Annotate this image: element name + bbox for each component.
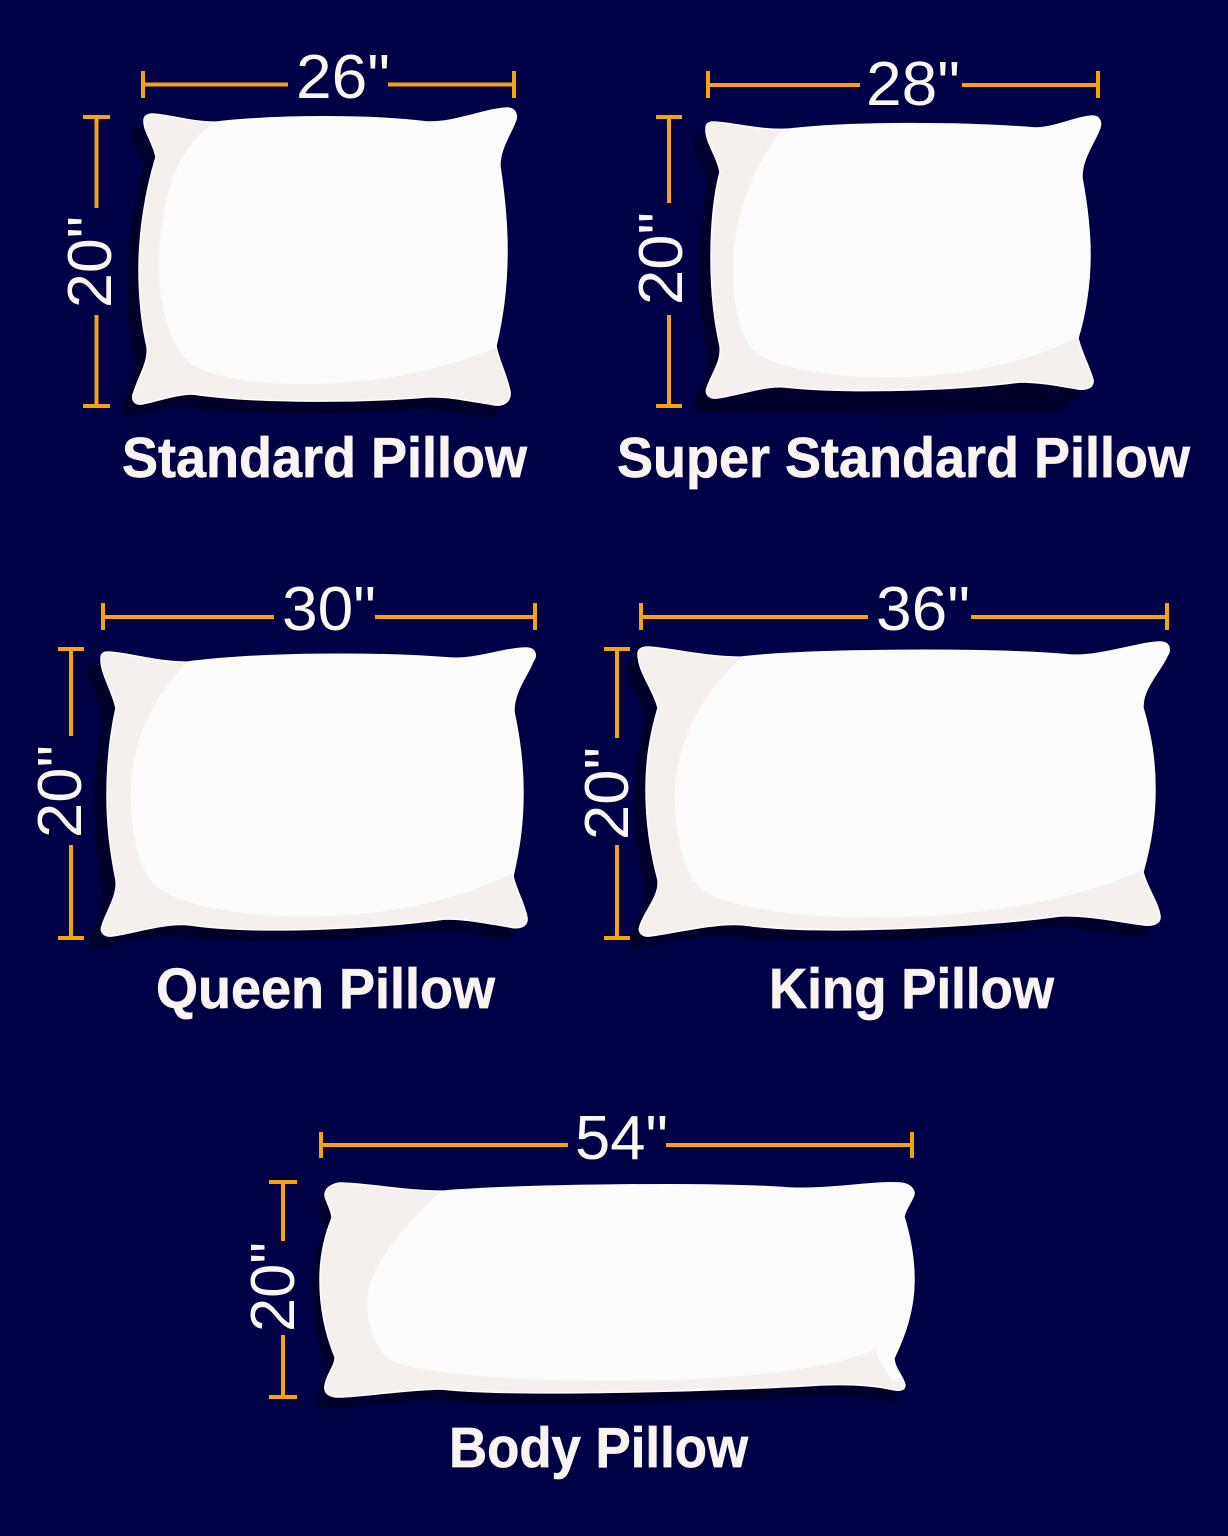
title: Super Standard Pillow: Super Standard Pillow: [617, 426, 1191, 490]
height measure: 20 inches: 20": [56, 216, 125, 308]
title: Body Pillow: Body Pillow: [449, 1416, 749, 1480]
pillow: body: [312, 1170, 930, 1408]
pillow: super standard: [694, 100, 1110, 414]
width measure: 36 inches: [641, 575, 1167, 644]
panel: standard pillow: [56, 43, 530, 490]
width measure: 54 inches: 54": [575, 1104, 668, 1173]
height measure: 20 inches: 20": [627, 212, 696, 305]
height measure: 20 inches: 20": [573, 747, 642, 840]
width measure: 36 inches: 36": [876, 575, 970, 644]
pillow: standard: [121, 100, 530, 417]
height measure: 20 inches: [56, 117, 125, 406]
height measure: 20 inches: [627, 117, 696, 406]
title: Queen Pillow: Queen Pillow: [156, 957, 496, 1021]
pillow: king: [626, 630, 1180, 947]
width measure: 54 inches: [321, 1104, 912, 1173]
width measure: 30 inches: [103, 575, 535, 644]
height measure: 20 inches: [239, 1182, 308, 1397]
title: King Pillow: King Pillow: [769, 957, 1055, 1021]
panel: super standard pillow: [617, 50, 1191, 490]
width measure: 28 inches: [708, 50, 1098, 119]
panel: queen pillow: [26, 575, 545, 1021]
panel: king pillow: [573, 575, 1180, 1021]
height measure: 20 inches: [26, 649, 95, 938]
height measure: 20 inches: 20": [239, 1242, 308, 1332]
pillow: queen: [88, 630, 545, 947]
height measure: 20 inches: [573, 649, 642, 938]
width measure: 30 inches: 30": [282, 575, 376, 644]
width measure: 26 inches: 26": [296, 43, 390, 112]
panel: body pillow: [239, 1104, 930, 1480]
width measure: 26 inches: [143, 43, 514, 112]
height measure: 20 inches: 20": [26, 745, 95, 838]
width measure: 28 inches: 28": [866, 50, 960, 119]
title: Standard Pillow: Standard Pillow: [122, 426, 528, 490]
